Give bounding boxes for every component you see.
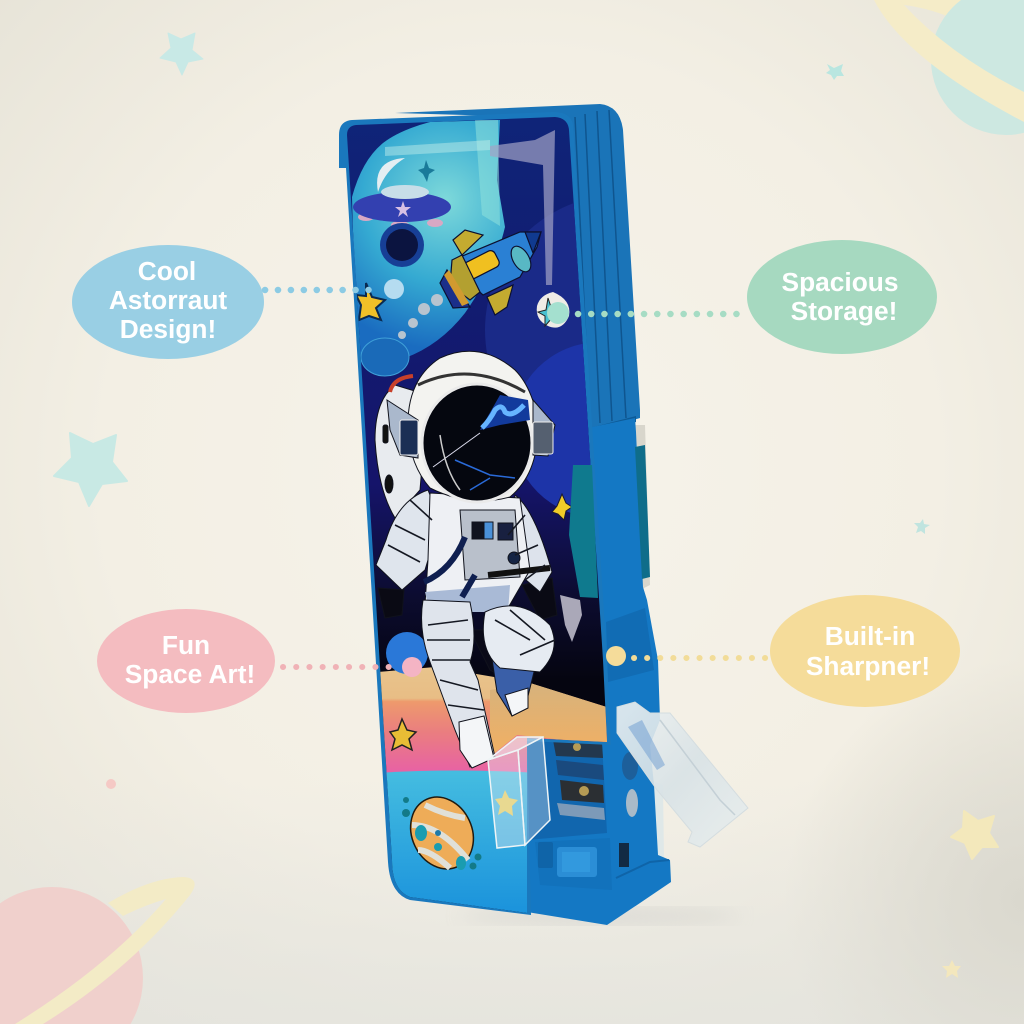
leg left xyxy=(422,600,495,767)
small planet xyxy=(386,632,428,674)
star sticker xyxy=(418,160,435,182)
suit stripes xyxy=(388,500,555,710)
torso xyxy=(425,493,530,608)
callout: cool astronaut design: Design! xyxy=(120,314,216,344)
callout: fun space art xyxy=(97,609,422,713)
chest pack xyxy=(460,510,520,580)
sand right xyxy=(490,683,610,757)
clasp left xyxy=(569,465,598,598)
callout: spacious storage: Spacious xyxy=(782,267,898,297)
callout: cool astronaut design: Cool xyxy=(138,256,196,286)
bubble xyxy=(361,338,409,376)
front frame xyxy=(339,112,611,915)
callout: spacious storage: Storage! xyxy=(791,296,897,326)
clear lid left xyxy=(488,737,550,848)
callout: built-in sharpener: Built-in xyxy=(825,621,915,651)
glove right xyxy=(522,578,557,620)
case layers: upper side xyxy=(395,104,640,434)
decoration: top right planet xyxy=(874,0,1024,135)
backpack xyxy=(374,384,422,518)
case middle section xyxy=(588,418,660,745)
ear pods xyxy=(387,400,555,458)
callout: built-in sharpener: Sharpner! xyxy=(806,651,930,681)
star in sea xyxy=(495,790,518,816)
callout: fun space art: Space Art! xyxy=(125,659,255,689)
clear strip xyxy=(650,780,664,858)
decoration: bottom left planet xyxy=(0,877,195,1024)
lower leg right xyxy=(492,661,534,717)
white star sticker xyxy=(537,292,569,328)
ufo xyxy=(353,158,451,229)
groove xyxy=(606,608,654,682)
sea xyxy=(386,770,527,913)
small star xyxy=(552,494,572,520)
thigh right xyxy=(483,606,554,672)
rocket xyxy=(440,230,541,315)
callout: cool astronaut design xyxy=(72,245,404,359)
teal moon xyxy=(352,120,505,362)
sand stripes xyxy=(378,667,610,780)
jupiter planet xyxy=(402,796,482,870)
legs back xyxy=(474,630,494,672)
callout: built-in sharpener xyxy=(606,595,960,707)
side holes xyxy=(619,752,638,867)
arm right xyxy=(514,494,552,592)
latch xyxy=(535,838,669,890)
astronaut xyxy=(375,351,557,768)
hole xyxy=(380,223,424,267)
sharpener cavity xyxy=(525,738,607,840)
grey glare xyxy=(560,595,582,642)
callout: fun space art: Fun xyxy=(162,630,210,660)
product shadow xyxy=(460,908,740,924)
inner gap xyxy=(634,425,650,590)
helmet xyxy=(408,351,538,501)
callout: spacious storage xyxy=(547,240,937,354)
yellow star xyxy=(356,283,385,320)
clear lid right xyxy=(617,702,748,847)
glitter trail xyxy=(398,294,443,339)
front face xyxy=(347,117,607,913)
sand star xyxy=(390,719,416,750)
boot left xyxy=(459,716,494,768)
arm left xyxy=(376,489,430,590)
pencil case xyxy=(339,104,755,925)
glove left xyxy=(378,588,404,618)
sharpener body xyxy=(527,690,671,925)
callout: cool astronaut design: Astorraut xyxy=(109,285,227,315)
visor xyxy=(422,384,532,502)
clasp right xyxy=(635,445,650,579)
hip glitter xyxy=(425,585,510,612)
